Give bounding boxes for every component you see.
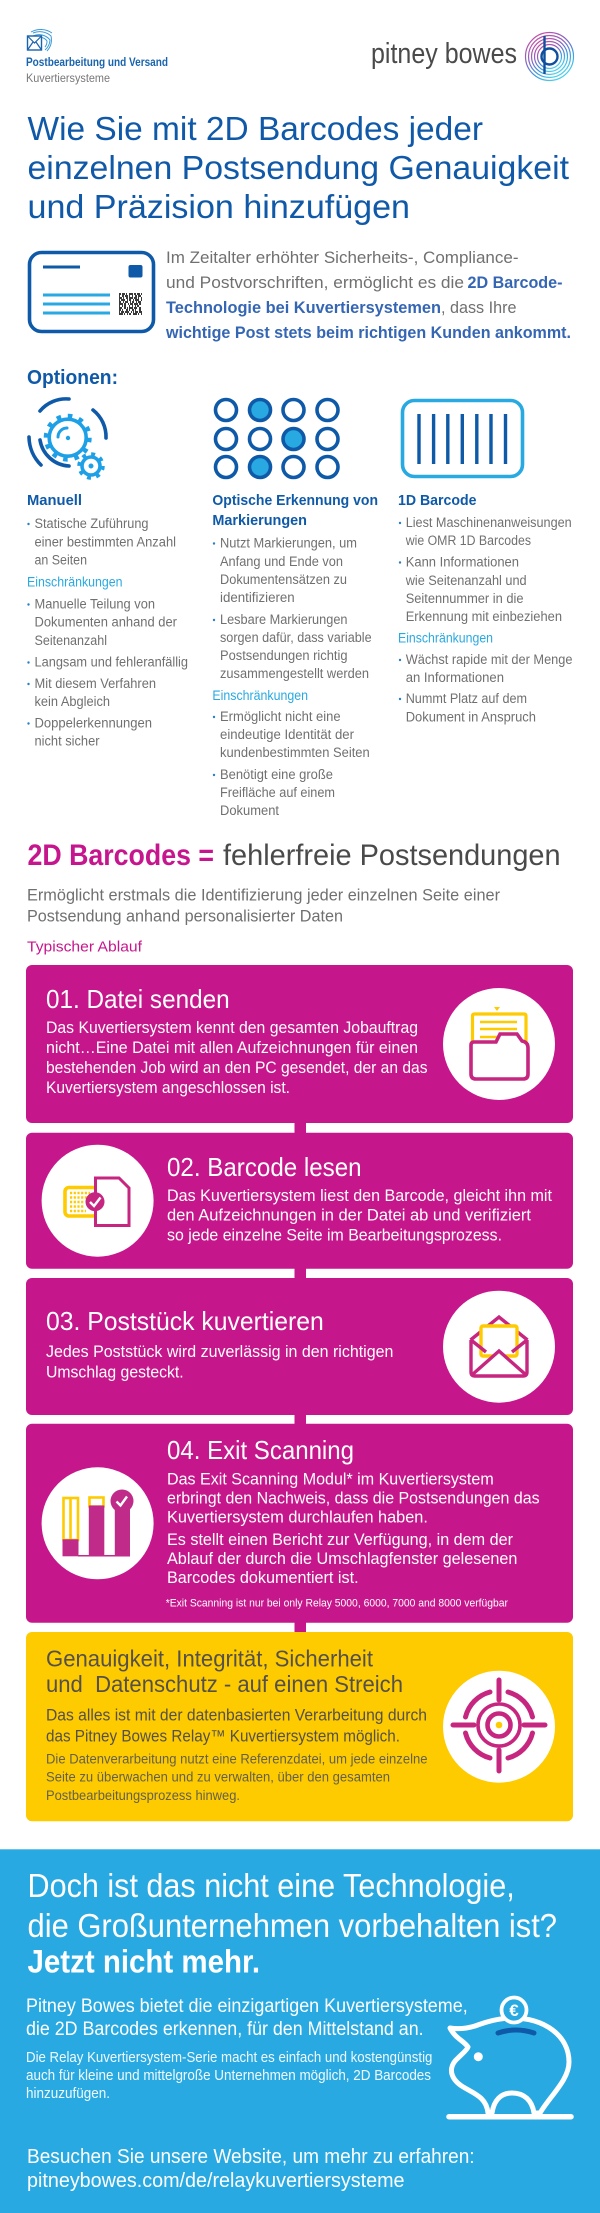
list: limitations: Seitenanzahl	[34, 633, 107, 648]
list: limitations: Dokument in Anspruch	[406, 710, 536, 725]
list: features	[27, 516, 176, 568]
list: limitations: Wächst rapide mit der Menge	[406, 652, 572, 667]
subheading: Einschränkungen	[27, 575, 122, 590]
list: features: Postsendungen richtig	[220, 648, 348, 663]
summary lead: Das alles ist mit der datenbasierten Verarbeitung durch	[46, 1707, 427, 1725]
subheading text: Ermöglicht erstmals die Identifizierung jeder einzelnen Seite einer	[27, 887, 500, 905]
icon: optical marks grid	[216, 400, 338, 478]
list: features: Seitennummer in die	[406, 591, 524, 606]
panel: Manuell	[27, 399, 188, 749]
icon: envelope with signal rings	[28, 29, 52, 51]
intro text: Im Zeitalter erhöhter Sicherheits-, Compliance-	[166, 249, 518, 267]
step text: Barcodes dokumentiert ist.	[167, 1569, 359, 1587]
list: limitations: Dokumenten anhand der	[34, 615, 177, 630]
lead text: Pitney Bowes bietet die einzigartigen Kuvertiersysteme,	[26, 1996, 468, 2017]
detail text: hinzuzufügen.	[26, 2086, 110, 2102]
intro text	[165, 249, 571, 342]
heading: Markierungen	[212, 512, 307, 529]
list: limitations: Langsam und fehleranfällig	[34, 655, 188, 670]
panel: call to action	[0, 1849, 600, 2213]
logo mark	[526, 32, 574, 80]
list: limitations: Mit diesem Verfahren	[34, 676, 156, 691]
list: limitations: Ermöglicht nicht eine	[220, 709, 341, 724]
icon: open envelope	[443, 1291, 555, 1403]
heading: 1D Barcode	[398, 492, 476, 509]
step title: 02. Barcode lesen	[167, 1152, 362, 1182]
list: features: sorgen dafür, dass variable	[220, 630, 372, 645]
intro text: , dass Ihre	[441, 299, 516, 317]
title: einzelnen Postsendung Genauigkeit	[28, 149, 569, 186]
step text	[167, 1187, 552, 1245]
division name: Postbearbeitung und Versand	[26, 57, 168, 69]
logo wordmark: pitney bowes	[371, 38, 517, 70]
title: Wie Sie mit 2D Barcodes jeder	[28, 110, 483, 147]
icon: target	[443, 1671, 555, 1783]
detail text: auch für kleine und mittelgroße Unternehmen möglich, 2D Barcodes	[26, 2068, 431, 2084]
subheading text	[27, 887, 500, 926]
icon: file into folder	[443, 988, 555, 1100]
list: limitations: kein Abgleich	[34, 694, 110, 709]
step text: Ablauf der durch die Umschlagfenster gelesenen	[167, 1550, 517, 1568]
list: features: Statische Zuführung	[34, 516, 148, 531]
list: features	[213, 536, 372, 681]
panel: step 02	[26, 1133, 573, 1269]
heading: 2D Barcodes = fehlerfreie Postsendungen: 2D Barcodes =	[28, 839, 214, 872]
step text: Das Exit Scanning Modul* im Kuvertiersystem	[167, 1470, 494, 1488]
step text: Umschlag gesteckt.	[46, 1364, 184, 1382]
heading	[212, 492, 378, 529]
list: features: Dokumentensätzen zu	[220, 572, 347, 587]
list: limitations: kundenbestimmten Seiten	[220, 745, 370, 760]
icon: piggy bank: €	[509, 2001, 519, 2020]
step text: den Aufzeichnungen in der Datei ab und verifiziert	[167, 1207, 531, 1225]
question heading: die Großunternehmen vorbehalten ist?	[28, 1907, 557, 1944]
header	[26, 29, 574, 85]
summary detail	[46, 1751, 428, 1803]
summary detail: Die Datenverarbeitung nutzt eine Referenzdatei, um jede einzelne	[46, 1751, 428, 1766]
lead text: die 2D Barcodes erkennen, für den Mittelstand an.	[26, 2019, 424, 2040]
list: features: Lesbare Markierungen	[220, 612, 348, 627]
list: limitations: eindeutige Identität der	[220, 727, 354, 742]
heading: Optische Erkennung von	[212, 492, 378, 509]
label: Typischer Ablauf: Typischer Ablauf	[27, 939, 143, 956]
panel: step 01	[26, 965, 573, 1123]
question heading: Jetzt nicht mehr.	[28, 1944, 260, 1980]
panel: step 04	[26, 1424, 573, 1623]
list: features: Erkennung mit einbeziehen	[406, 609, 562, 624]
step text: so jede einzelne Seite im Bearbeitungsprozess.	[167, 1227, 502, 1245]
intro text: wichtige Post stets beim richtigen Kunden ankommt.	[165, 324, 571, 342]
list: features: wie Seitenanzahl und	[405, 573, 527, 588]
summary detail: Postbearbeitungsprozess hinweg.	[46, 1788, 240, 1803]
list: features: wie OMR 1D Barcodes	[405, 533, 531, 548]
icon: scanned bars	[42, 1467, 154, 1579]
product name: Kuvertiersysteme	[26, 73, 110, 85]
subheading: Einschränkungen	[398, 631, 493, 646]
step title: 03. Poststück kuvertieren	[46, 1306, 324, 1336]
list: features: identifizieren	[220, 590, 295, 605]
subheading text: Postsendung anhand personalisierter Daten	[27, 908, 343, 926]
list: features: zusammengestellt werden	[220, 666, 369, 681]
title: und Präzision hinzufügen	[28, 188, 410, 225]
summary detail: Seite zu überwachen und zu verwalten, über den gesamten	[46, 1770, 390, 1785]
panel: step 03	[26, 1278, 573, 1415]
panel: Optische Erkennung von Markierungen	[212, 400, 378, 818]
panel: 1D Barcode	[398, 400, 572, 725]
step text: bestehenden Job wird an den PC gesendet, der an das	[46, 1059, 428, 1077]
list: limitations	[399, 652, 572, 725]
summary title: und Datenschutz - auf einen Streich	[46, 1671, 403, 1697]
summary lead: das Pitney Bowes Relay™ Kuvertiersystem möglich.	[46, 1728, 400, 1746]
intro text: 2D Barcode-	[468, 274, 562, 292]
list: features	[399, 515, 572, 624]
lead text	[26, 1996, 468, 2040]
summary title: Genauigkeit, Integrität, Sicherheit	[46, 1646, 374, 1672]
icon: 1D barcode	[402, 400, 522, 476]
step text	[46, 1019, 428, 1097]
list: limitations: Doppelerkennungen	[34, 716, 152, 731]
heading: Manuell	[27, 492, 82, 509]
list: limitations: Nummt Platz auf dem	[406, 691, 527, 706]
list: limitations	[213, 709, 370, 818]
list: features: Nutzt Markierungen, um	[220, 536, 357, 551]
list: limitations: Benötigt eine große	[220, 767, 333, 782]
list: features: Liest Maschinenanweisungen	[406, 515, 572, 530]
step text: Kuvertiersystem angeschlossen ist.	[46, 1079, 290, 1097]
panel: summary	[26, 1632, 573, 1821]
icon: letter with 2D barcode	[30, 252, 154, 332]
summary title	[46, 1646, 403, 1697]
list: limitations: nicht sicher	[34, 734, 100, 749]
step text	[46, 1343, 393, 1382]
question heading	[28, 1867, 557, 1980]
list: features: Kann Informationen	[406, 555, 519, 570]
intro text: und Postvorschriften, ermöglicht es die	[166, 274, 464, 292]
heading: 2D Barcodes = fehlerfreie Postsendungen	[28, 839, 561, 872]
detail text	[26, 2050, 432, 2102]
list: limitations: Dokument	[220, 803, 279, 818]
heading: 2D Barcodes = fehlerfreie Postsendungen: fehlerfreie Postsendungen	[223, 839, 561, 872]
list: limitations	[27, 597, 188, 749]
subheading: Einschränkungen	[212, 688, 308, 703]
footnote: *Exit Scanning ist nur bei only Relay 5000, 6000, 7000 and 8000 verfügbar	[166, 1598, 508, 1610]
list: features: an Seiten	[34, 553, 87, 568]
website	[27, 2146, 475, 2192]
step text: Jedes Poststück wird zuverlässig in den richtigen	[46, 1343, 393, 1361]
website: Besuchen Sie unsere Website, um mehr zu erfahren:	[27, 2146, 475, 2168]
title	[28, 110, 569, 225]
step text: Das Kuvertiersystem kennt den gesamten Jobauftrag	[46, 1019, 418, 1037]
step title: 01. Datei senden	[46, 984, 230, 1014]
list: limitations: Manuelle Teilung von	[34, 597, 155, 612]
list: limitations: an Informationen	[406, 670, 504, 685]
list: features: Anfang und Ende von	[220, 554, 343, 569]
step text	[167, 1470, 540, 1587]
question heading: Doch ist das nicht eine Technologie,	[28, 1867, 515, 1904]
icon: gears	[29, 399, 106, 478]
step title: 04. Exit Scanning	[167, 1435, 354, 1465]
heading: Optionen: Optionen:	[27, 367, 118, 389]
website: pitneybowes.com/de/relaykuvertiersysteme	[27, 2170, 404, 2192]
step text: nicht…Eine Datei mit allen Aufzeichnungen für einen	[46, 1039, 418, 1057]
step text: Kuvertiersystem durchlaufen haben.	[167, 1509, 428, 1527]
detail text: Die Relay Kuvertiersystem-Serie macht es einfach und kostengünstig	[26, 2050, 432, 2066]
list: features: einer bestimmten Anzahl	[34, 535, 176, 550]
icon: piggy bank	[449, 1998, 571, 2117]
list: limitations: Freifläche auf einem	[220, 785, 335, 800]
step text: Das Kuvertiersystem liest den Barcode, gleicht ihn mit	[167, 1187, 552, 1205]
step text: Es stellt einen Bericht zur Verfügung, in dem der	[167, 1531, 513, 1549]
intro text: Technologie bei Kuvertiersystemen	[166, 299, 441, 317]
summary lead	[46, 1707, 427, 1746]
step text: erbringt den Nachweis, dass die Postsendungen das	[167, 1489, 540, 1507]
icon: barcode check on document	[42, 1145, 154, 1257]
